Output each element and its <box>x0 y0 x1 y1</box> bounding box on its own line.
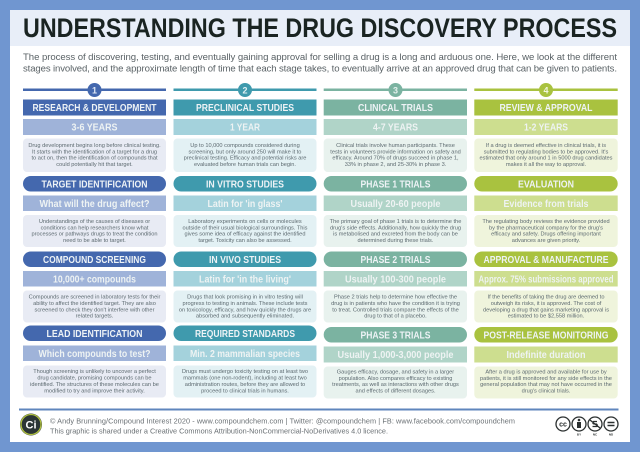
subhead: indefinite duration: Indefinite duration <box>506 350 586 361</box>
intro text: The process of discovering, testing, and eventually gaining approval for selling a drug is a long and arduous one. Here, we look at the different <box>23 52 617 63</box>
duration: 4-7 years: 4-7 YEARS <box>373 123 418 134</box>
intro text: stages involved, and the approximate length of time that each stage takes, to eventually arrive at an approved drug that can be given to patients. <box>23 64 617 74</box>
description: phase 3 trials: Gauges efficacy, dosage, and safety in a larger <box>337 369 454 375</box>
step 1 marker: 1 <box>92 85 97 95</box>
description: compound screening: ability to affect the identified target. They are also <box>33 301 156 307</box>
footer rule <box>19 408 618 410</box>
description: required standards: administration routes, before they are allowed to <box>185 382 305 388</box>
icon: creative commons licence badges: NC <box>593 432 598 436</box>
description: lead identification: Though screening is unlikely to uncover a perfect <box>33 369 156 375</box>
description: evaluation: advances are given priority. <box>512 238 581 244</box>
description: phase 1 trials <box>324 215 467 247</box>
pill: in vivo studies <box>174 252 316 267</box>
description: clinical trials: 33% in phase 2, and 25-30% in phase 3. <box>345 162 447 168</box>
description: target identification: need to be able to target. <box>63 238 126 244</box>
subhead: usually 20-60 people: Usually 20-60 people <box>350 199 441 210</box>
description: lead identification: identified. The structures of these molecules can be <box>30 382 159 388</box>
description: approval and manufacture: If the benefits of taking the drug are deemed to <box>488 294 604 300</box>
description: clinical trials <box>324 138 467 172</box>
description: review and approval: submitted to regulating bodies to be approved. It's <box>484 149 608 155</box>
subhead: usually 1,000-3,000 people <box>324 346 467 362</box>
description: in vivo studies: Drugs that look promising in in vitro testing will <box>187 294 303 300</box>
pill: in vivo studies: IN VIVO STUDIES <box>209 255 281 266</box>
description: review and approval: If a drug is deemed effective in clinical trials, it is <box>486 143 606 149</box>
panel: column 4 review and approval <box>474 83 618 398</box>
icon: creative commons licence badges <box>556 417 618 436</box>
description: post-release monitoring <box>474 366 618 398</box>
subhead: usually 20-60 people <box>324 196 467 211</box>
description: in vivo studies <box>174 290 316 322</box>
description: preclinical studies: preclinical testing. Efficacy and potential risks are <box>184 156 306 162</box>
subhead: 10,000+ compounds <box>23 271 166 286</box>
description: phase 3 trials: treatments, as well as interactions with other drugs <box>332 382 459 388</box>
step 2 marker: 2 <box>242 85 248 95</box>
pill: lead identification: LEAD IDENTIFICATION <box>46 329 142 340</box>
footer credits: © Andy Brunning/Compound Interest 2020 - www.compoundchem.com | Twitter: @compoundchem | FB: www.facebook.com/compoundchem <box>50 416 515 425</box>
description: research and development: to act on, then the identification of compounds that <box>31 156 158 162</box>
description: required standards: mammals (one non-rodent), including at least two <box>183 376 307 382</box>
description: evaluation <box>474 215 618 247</box>
pill: in vitro studies <box>174 176 316 192</box>
footer credits: This graphic is shared under a Creative Commons Attribution-NonCommercial-NoDerivatives 4.0 licence. <box>50 426 388 435</box>
subhead: latin for in glass: Latin for 'in glass' <box>208 199 282 210</box>
description: research and development: Drug development begins long before clinical testing. <box>28 143 161 149</box>
pill: lead identification <box>23 326 166 341</box>
description: phase 2 trials: drug is in patients who have the condition it is trying <box>331 301 460 307</box>
pill: compound screening <box>23 252 166 267</box>
duration: 1 year <box>174 119 316 135</box>
description: clinical trials: Clinical trials involve human participants. These <box>336 143 455 149</box>
duration: 1-2 years: 1-2 YEARS <box>524 123 568 134</box>
subhead: min 2 mammalian species <box>174 346 316 361</box>
pill: compound screening: COMPOUND SCREENING <box>43 255 146 266</box>
description: review and approval <box>474 138 618 172</box>
description: approval and manufacture: developing a drug that gains marketing approval is <box>483 307 609 313</box>
step 4 marker <box>474 83 618 97</box>
description: required standards <box>174 366 316 398</box>
description: compound screening: screened to check they don't interfere with other <box>35 307 155 313</box>
subhead: evidence from trials: Evidence from trials <box>504 199 589 210</box>
pill: evaluation: EVALUATION <box>518 180 574 190</box>
description: phase 1 trials: is metabolised and excreted from the body can be <box>333 232 458 238</box>
pill: required standards: REQUIRED STANDARDS <box>195 329 295 340</box>
description: compound screening: related targets. <box>76 314 114 320</box>
subhead: indefinite duration <box>474 346 618 362</box>
description: clinical trials: tests in volunteers provide information on safety and <box>330 149 461 155</box>
icon: compound interest logo <box>20 414 42 436</box>
icon: creative commons licence badges: ND <box>609 432 614 436</box>
description: research and development <box>23 138 166 172</box>
description: phase 2 trials <box>324 290 467 322</box>
description: phase 2 trials: drug to that of a placebo. <box>364 314 427 320</box>
step 2 marker <box>174 83 316 97</box>
pill: phase 3 trials <box>324 327 467 342</box>
description: post-release monitoring: general population that may not have occurred in the <box>480 382 612 388</box>
pill: phase 3 trials: PHASE 3 TRIALS <box>360 330 431 342</box>
description: target identification: processes or pathways drugs to treat the condition <box>31 232 158 238</box>
subhead: which compounds to test <box>23 346 166 361</box>
description: target identification: Understandings of the causes of diseases or <box>39 219 150 225</box>
description: preclinical studies: Up to 10,000 compounds considered during <box>190 143 300 149</box>
description: approval and manufacture: outweigh its risks, it is approved. The cost of <box>491 301 602 307</box>
description: phase 1 trials: drug's side effects. Additionally, how quickly the drug <box>330 225 461 231</box>
description: phase 1 trials: The primary goal of phase 1 trials is to determine the <box>330 219 461 225</box>
description: research and development: could potentially hit that target. <box>56 162 133 168</box>
header: research and development <box>23 100 166 116</box>
description: research and development: It starts with the identification of a target for a drug <box>32 149 157 155</box>
subhead: latin for in the living <box>174 271 316 286</box>
pill: phase 1 trials: PHASE 1 TRIALS <box>360 180 431 190</box>
subhead: usually 100-300 people <box>324 271 467 286</box>
description: in vivo studies: progress to testing in animals. These include tests <box>182 301 308 307</box>
subhead: 10,000+ compounds: 10,000+ compounds <box>53 274 136 285</box>
description: lead identification: drug candidate, promising compounds can be <box>37 376 152 382</box>
pill: post-release monitoring <box>474 327 618 342</box>
description: evaluation: efficacy and safety. Drugs offering important <box>491 232 601 238</box>
subhead: what will the drug affect: What will the drug affect? <box>40 199 150 210</box>
description: phase 3 trials <box>324 366 467 398</box>
description: phase 2 trials: Phase 2 trials help to determine how effective the <box>334 294 457 300</box>
pill: required standards <box>174 326 316 341</box>
description: compound screening: Compounds are screened in laboratory tests for their <box>29 294 160 300</box>
header: clinical trials <box>324 100 467 116</box>
description: preclinical studies: screening, but only around 250 will make it to <box>189 149 301 155</box>
description: approval and manufacture: estimated to be $2,558 million. <box>508 314 585 320</box>
pill: target identification: TARGET IDENTIFICATION <box>42 180 148 190</box>
description: in vivo studies: on toxicology, efficacy, and how quickly the drugs are <box>179 307 311 313</box>
duration: 3-6 years: 3-6 YEARS <box>72 123 118 134</box>
description: evaluation: by the pharmaceutical company for the drug's <box>489 225 603 231</box>
subhead: what will the drug affect <box>23 196 166 211</box>
description: phase 3 trials: and effects of different dosages. <box>355 389 436 395</box>
duration: 3-6 years <box>23 119 166 135</box>
panel: column 1 research and development <box>23 83 166 398</box>
pill: phase 1 trials <box>324 176 467 192</box>
description: review and approval: makes it all the way to approval. <box>506 162 587 168</box>
description: phase 3 trials: population. Also compares efficacy to existing <box>339 376 452 382</box>
step 3 marker: 3 <box>393 85 398 95</box>
pill: phase 2 trials: PHASE 2 TRIALS <box>360 255 431 266</box>
header: review and approval <box>474 100 618 116</box>
description: compound screening <box>23 290 166 322</box>
footer credits <box>50 416 515 435</box>
description: post-release monitoring: After a drug is approved and available for use by <box>485 369 607 375</box>
description: post-release monitoring: patients, it is still monitored for any side effects in the <box>480 376 612 382</box>
description: in vitro studies: target. Toxicity can also be assessed. <box>198 238 292 244</box>
title band <box>10 10 630 46</box>
description: target identification <box>23 215 166 247</box>
description: review and approval: estimated that only around 1 in 5000 drug candidates <box>480 156 613 162</box>
description: approval and manufacture <box>474 290 618 322</box>
description: required standards: Drugs must undergo toxicity testing on at least two <box>182 369 308 375</box>
description: clinical trials: efficacy. Around 70% of drugs succeed in phase 1, <box>332 156 459 162</box>
description: evaluation: The regulating body reviews the evidence provided <box>482 219 610 225</box>
description: lead identification <box>23 366 166 398</box>
panel: column 3 clinical trials <box>324 83 467 398</box>
header: preclinical studies: PRECLINICAL STUDIES <box>196 103 294 114</box>
panel: column 2 preclinical studies <box>174 83 316 398</box>
icon: creative commons licence badges: cc <box>559 422 567 428</box>
header: clinical trials: CLINICAL TRIALS <box>358 103 433 114</box>
description: in vitro studies: Laboratory experiments on cells or molecules <box>188 219 302 225</box>
pill: phase 2 trials <box>324 252 467 267</box>
step 4 marker: 4 <box>543 85 549 95</box>
intro text <box>23 52 617 74</box>
subhead: approx 75% submissions approved <box>474 271 618 286</box>
description: phase 2 trials: to treat. Controlled trials compare the effects of the <box>332 307 459 313</box>
description: preclinical studies: evaluated before human trials can begin. <box>194 162 296 168</box>
subhead: latin for in glass <box>174 196 316 211</box>
duration: 1-2 years <box>474 119 618 135</box>
header: preclinical studies <box>174 100 316 116</box>
subhead: usually 1,000-3,000 people: Usually 1,000-3,000 people <box>338 350 454 361</box>
description: lead identification: modified to try and improve their activity. <box>44 388 145 394</box>
description: preclinical studies <box>174 138 316 172</box>
step 1 marker <box>23 83 166 97</box>
description: target identification: conditions can help researchers know what <box>41 225 149 231</box>
pill: evaluation <box>474 176 618 192</box>
description: in vitro studies: outside of their usual biological surroundings. This <box>182 225 308 231</box>
pill: approval and manufacture <box>474 252 618 267</box>
pill: post-release monitoring: POST-RELEASE MONITORING <box>484 330 609 342</box>
pill: in vitro studies: IN VITRO STUDIES <box>206 180 284 190</box>
description: required standards: proceed to clinical trials in humans. <box>201 388 289 394</box>
header: research and development: RESEARCH & DEVELOPMENT <box>32 103 156 114</box>
subhead: latin for in the living: Latin for 'in the living' <box>199 274 291 285</box>
pill: target identification <box>23 176 166 192</box>
pill: approval and manufacture: APPROVAL & MANUFACTURE <box>484 255 609 266</box>
description: in vivo studies: absorbed and subsequently eliminated. <box>196 314 295 320</box>
description: in vitro studies: gives some idea of efficacy against the identified <box>185 232 305 238</box>
description: post-release monitoring: drug's clinical trials. <box>522 389 571 395</box>
icon: creative commons licence badges: BY <box>577 432 581 436</box>
header: review and approval: REVIEW & APPROVAL <box>500 103 592 114</box>
subhead: evidence from trials <box>474 196 618 211</box>
description: in vitro studies <box>174 215 316 247</box>
duration: 1 year: 1 YEAR <box>230 123 261 134</box>
step 3 marker <box>324 83 467 97</box>
subhead: min 2 mammalian species: Min. 2 mammalian species <box>190 349 300 360</box>
subhead: usually 100-300 people: Usually 100-300 people <box>345 274 446 285</box>
subhead: which compounds to test: Which compounds to test? <box>38 349 150 360</box>
duration: 4-7 years <box>324 119 467 135</box>
icon: compound interest logo: Ci <box>26 420 36 432</box>
description: phase 1 trials: determined during these trials. <box>358 238 434 244</box>
